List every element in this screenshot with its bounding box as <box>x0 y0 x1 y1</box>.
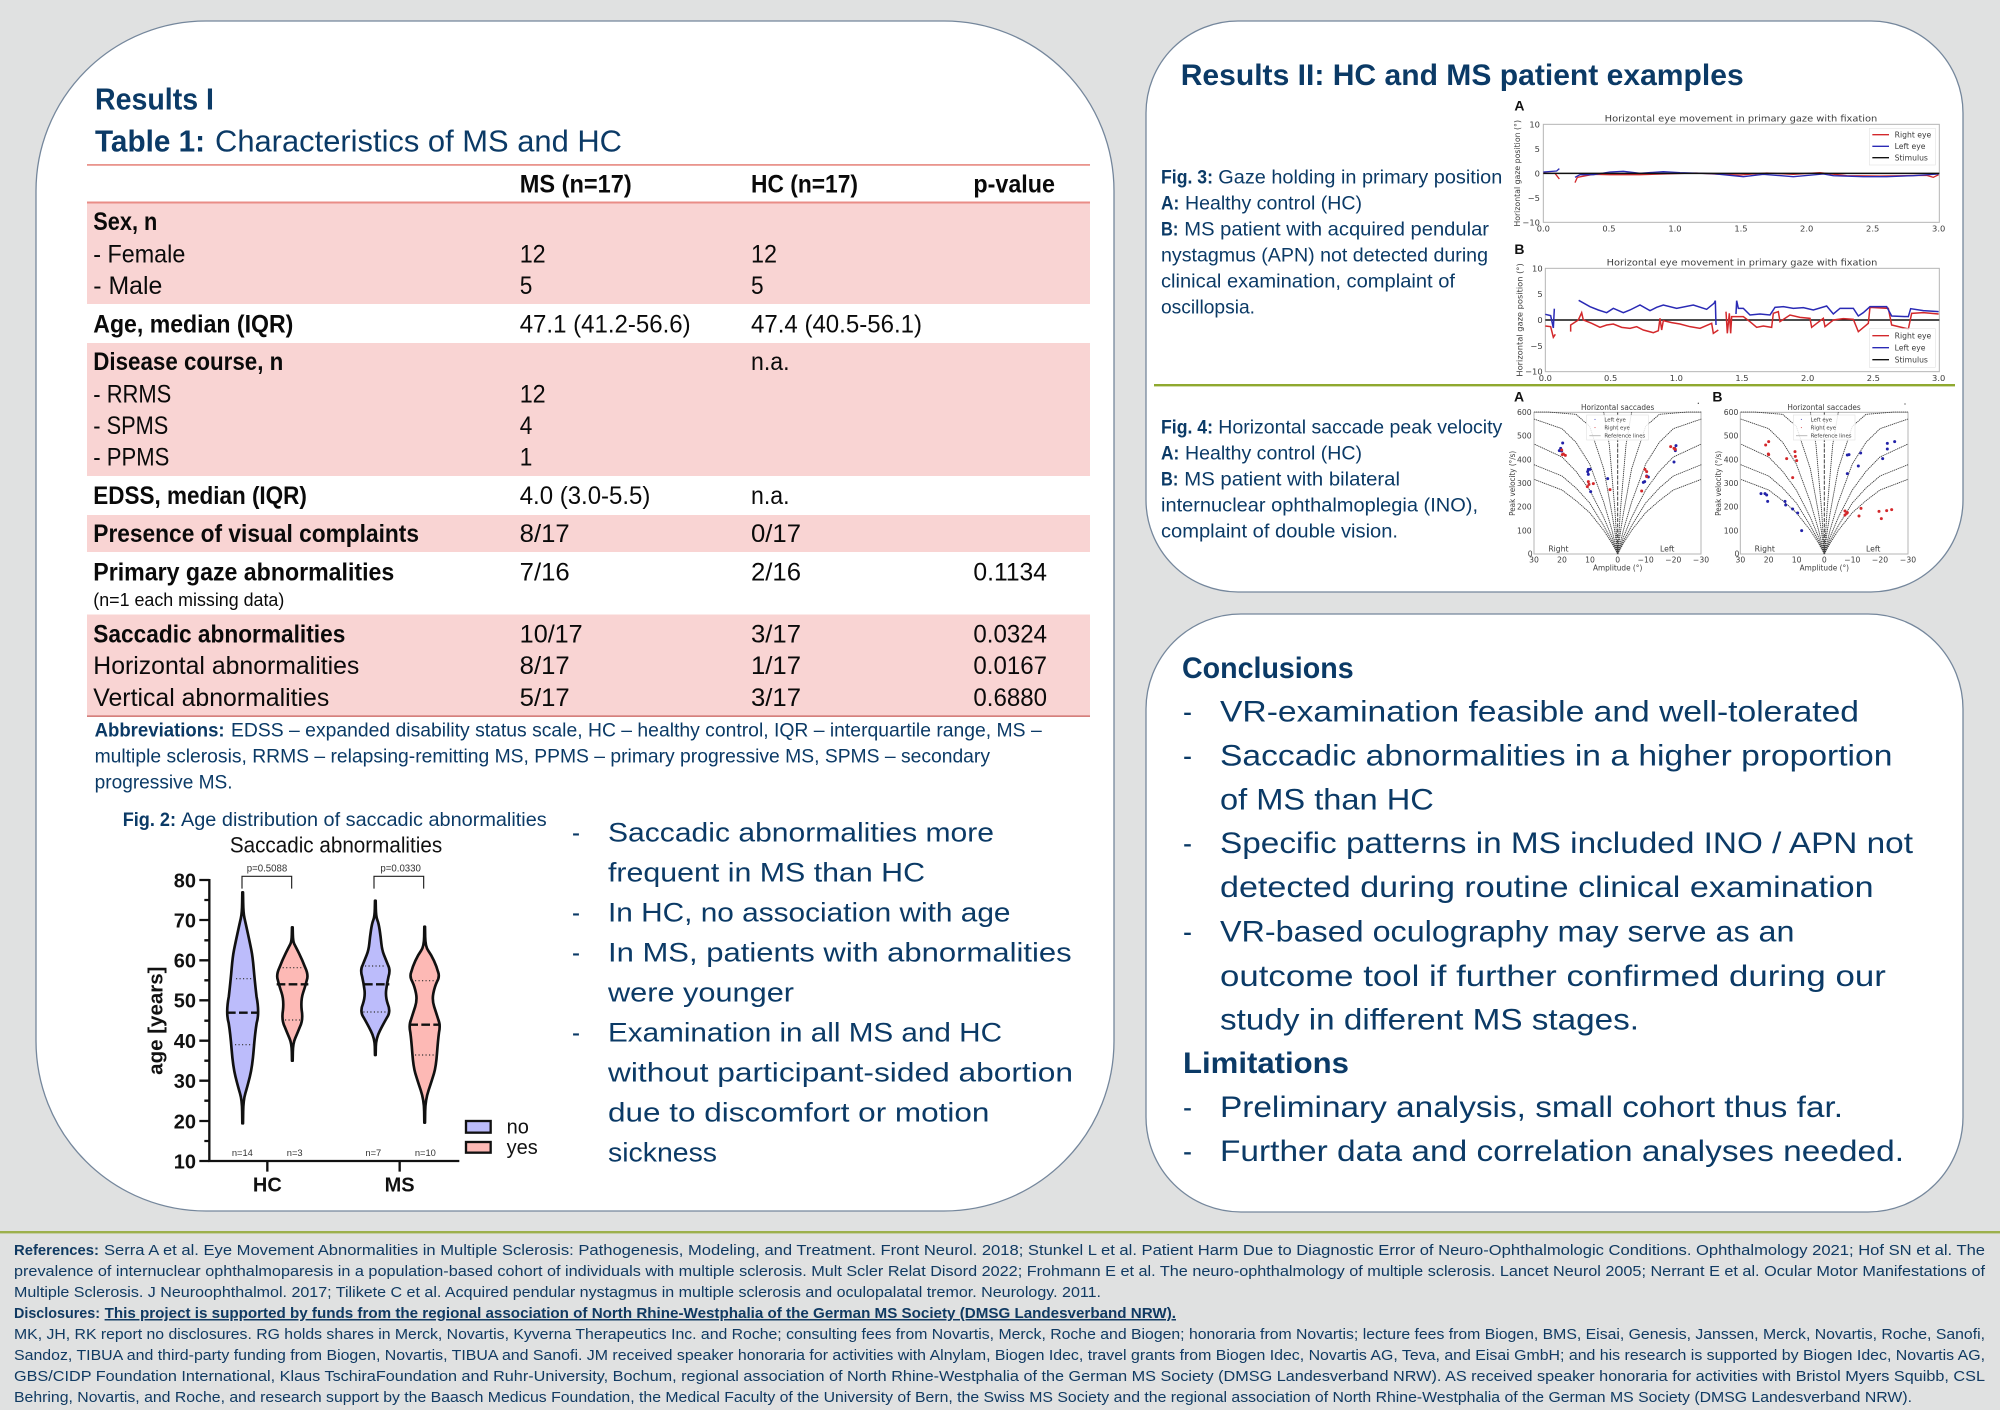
references: References: <box>14 1242 99 1259</box>
y axis labels: 50 <box>174 991 196 1013</box>
legend <box>466 1116 538 1159</box>
row: visual complaints: 0/17 <box>751 520 801 548</box>
figure 3 caption: Fig. 3: <box>1161 166 1213 188</box>
list: conclusions: - <box>1183 696 1192 729</box>
row: vertical abnormalities: Vertical abnormalities <box>93 684 329 712</box>
abbreviations text <box>95 720 1042 793</box>
chart: fig 3B MS patient gaze trace: −5 <box>1530 341 1543 351</box>
y axis labels: 80 <box>174 870 196 892</box>
chart: fig 4A healthy control saccades: Reference lines <box>1604 433 1645 439</box>
chart: fig 4A healthy control saccades: −20 <box>1665 555 1682 564</box>
chart: fig 3A healthy control gaze trace: 0 <box>1535 168 1540 178</box>
list: conclusions: Specific patterns in MS included INO / APN not <box>1220 827 1914 860</box>
heading: limitations: Limitations <box>1183 1047 1349 1080</box>
chart: fig 4B MS patient saccades: −30 <box>1900 555 1916 564</box>
chart: fig 3A healthy control gaze trace: −5 <box>1528 193 1540 203</box>
abbreviations text: EDSS – expanded disability status scale, HC – healthy control, IQR – interquartile range, MS – <box>231 720 1042 742</box>
row: sex: 5 <box>751 272 764 300</box>
chart: fig 4B MS patient saccades: 0 <box>1822 555 1827 564</box>
chart: fig 3B MS patient gaze trace: 0 <box>1537 315 1543 325</box>
chart: fig 3A healthy control gaze trace: 2.5 <box>1866 224 1879 234</box>
chart: fig 4B MS patient saccades: −10 <box>1844 555 1861 564</box>
row: saccadic abnormalities: 3/17 <box>751 620 801 648</box>
row: saccadic abnormalities <box>93 620 1047 648</box>
figure 3 caption <box>1161 166 1502 318</box>
list: conclusions: - <box>1183 827 1192 860</box>
text block: findings list: without participant-sided abortion <box>607 1058 1073 1088</box>
panel: conclusions and limitations <box>1146 614 1963 1212</box>
row: primary gaze abnormalities: 2/16 <box>751 558 801 586</box>
heading: results II: Results II: HC and MS patient examples <box>1181 59 1744 92</box>
figure 3 caption: Healthy control (HC) <box>1185 192 1362 214</box>
chart: fig 4A healthy control saccades: 0 <box>1615 555 1620 564</box>
text block: findings list <box>572 818 1073 1168</box>
disclosures: Disclosures: <box>14 1305 100 1322</box>
figure 3 caption: MS patient with acquired pendular <box>1184 218 1490 240</box>
figure 3 caption: A: <box>1161 192 1179 214</box>
list: conclusions: outcome tool if further confirmed during our <box>1220 960 1886 993</box>
row: primary gaze abnormalities <box>93 558 1047 610</box>
chart: fig 3B MS patient gaze trace: −10 <box>1525 367 1543 377</box>
figure 3 caption: oscillopsia. <box>1161 296 1255 318</box>
chart: fig 4A healthy control saccades: Horizontal saccades <box>1581 403 1654 412</box>
row: sex: Sex, n <box>93 208 157 236</box>
x axis labels: MS <box>385 1175 415 1197</box>
row: age: 47.4 (40.5-56.1) <box>751 310 922 338</box>
sample size labels: n=7 <box>365 1148 381 1158</box>
chart: fig 3A healthy control gaze trace: 0.0 <box>1537 224 1550 234</box>
row: vertical abnormalities: 0.6880 <box>973 684 1047 712</box>
violin: HC no <box>227 892 259 1123</box>
row: disease course: - PPMS <box>93 444 169 472</box>
chart: fig 4A healthy control saccades: 400 <box>1517 455 1532 464</box>
figure 3 caption: Gaze holding in primary position <box>1218 166 1502 188</box>
row: visual complaints: 8/17 <box>520 520 570 548</box>
disclosures <box>14 1305 1985 1406</box>
chart: fig 3A healthy control gaze trace: A <box>1514 98 1524 114</box>
row: sex: 5 <box>520 272 532 300</box>
chart: fig 3B MS patient gaze trace: Horizontal gaze position (°) <box>1516 263 1525 377</box>
figure 3 caption: B: <box>1161 218 1178 240</box>
chart: fig 3A healthy control gaze trace: 5 <box>1535 144 1540 154</box>
chart: fig 4A healthy control saccades: Right eye <box>1604 425 1630 431</box>
row: sex: - Female <box>93 240 185 268</box>
text block: findings list: - <box>572 1018 580 1048</box>
row: primary gaze abnormalities: Primary gaze abnormalities <box>93 558 394 586</box>
text block: findings list: were younger <box>607 978 794 1008</box>
chart: fig 4B MS patient saccades: 500 <box>1724 432 1738 441</box>
chart: fig 3B MS patient gaze trace: Right eye <box>1895 331 1931 340</box>
sample size labels <box>232 1148 436 1158</box>
disclosures: MK, JH, RK report no disclosures. RG holds shares in Merck, Novartis, Kyverna Therapeutics Inc. and Roche; consulting fees from Novartis, Merck, Roche and Biogen; honoraria from Novartis; lecture fees from Biogen, BMS, Eisai, Genesis, Janssen, Merck, Novartis, Roche, Sanofi, <box>14 1326 1985 1343</box>
row: disease course: 4 <box>520 412 532 440</box>
list: conclusions: of MS than HC <box>1220 783 1434 816</box>
chart: fig 4B MS patient saccades: B <box>1712 389 1722 405</box>
chart: fig 4B MS patient saccades: 100 <box>1724 526 1738 535</box>
row: visual complaints <box>93 520 801 548</box>
panel: results I <box>36 21 1114 1211</box>
list: limitations: Preliminary analysis, small cohort thus far. <box>1220 1091 1843 1124</box>
legend: no <box>507 1116 529 1138</box>
chart: fig 4B MS patient saccades: Left eye <box>1811 417 1832 423</box>
chart: fig 4A healthy control saccades: Left <box>1660 545 1674 554</box>
chart: fig 3B MS patient gaze trace: 10 <box>1532 263 1543 273</box>
chart: fig 3B MS patient gaze trace: Horizontal eye movement in primary gaze with fixation <box>1607 259 1877 269</box>
chart: fig 3A healthy control gaze trace: Horizontal gaze position (°) <box>1513 120 1522 227</box>
chart: fig 4A healthy control saccades: 100 <box>1517 526 1532 535</box>
chart: fig 4A healthy control saccades: Amplitude (°) <box>1593 564 1642 573</box>
chart: fig 4B MS patient saccades: 300 <box>1724 479 1738 488</box>
chart: fig 4A healthy control saccades: 200 <box>1517 503 1532 512</box>
abbreviations text: Abbreviations: <box>95 720 225 742</box>
list: limitations <box>1183 1091 1904 1168</box>
disclosures: GBS/CIDP Foundation International, Klaus TschiraFoundation and Ruhr-University, Bochum, regional association of North Rhine-Westphalia of the German MS Society (DMSG Landesverband NRW). AS received speaker honoraria for activities with Bristol Myers Squibb, CSL <box>14 1368 1985 1385</box>
row: EDSS: 4.0 (3.0-5.5) <box>520 482 650 510</box>
text block: findings list: sickness <box>608 1138 717 1168</box>
chart: fig 3B MS patient gaze trace: 1.0 <box>1670 373 1683 383</box>
chart: fig 4A healthy control saccades: −30 <box>1693 555 1709 564</box>
list: limitations: - <box>1183 1091 1192 1124</box>
chart: fig 4B MS patient saccades: Horizontal saccades <box>1787 403 1861 412</box>
table header row: MS (n=17) <box>520 171 632 199</box>
x axis labels: HC <box>253 1175 282 1197</box>
y axis labels: 40 <box>174 1031 196 1053</box>
text block: findings list: - <box>572 938 580 968</box>
list: conclusions: VR-based oculography may serve as an <box>1220 916 1794 948</box>
y axis labels: 70 <box>174 910 196 932</box>
figure 4 caption: MS patient with bilateral <box>1184 468 1400 490</box>
row: age: 47.1 (41.2-56.6) <box>520 310 691 338</box>
row: horizontal abnormalities <box>93 652 1047 680</box>
chart: fig 3A healthy control gaze trace: 0.5 <box>1602 224 1616 234</box>
y axis labels: 20 <box>174 1111 196 1133</box>
chart: fig 4A healthy control saccades: 300 <box>1517 479 1532 488</box>
chart: fig 4B MS patient saccades: Right <box>1755 545 1775 554</box>
row: age <box>93 310 922 338</box>
row: disease course: 12 <box>520 380 546 408</box>
chart: fig 3B MS patient gaze trace: 0.0 <box>1539 373 1552 383</box>
chart: fig 3B MS patient gaze trace: Left eye <box>1895 343 1926 352</box>
row: visual complaints: Presence of visual complaints <box>93 520 419 548</box>
panel: results II <box>1146 21 1963 592</box>
heading: table 1: Characteristics of MS and HC <box>215 124 622 159</box>
chart: fig 4B MS patient saccades: −20 <box>1872 555 1888 564</box>
list: conclusions: VR-examination feasible and well-tolerated <box>1220 696 1859 729</box>
list: conclusions: Saccadic abnormalities in a higher proportion <box>1220 739 1892 772</box>
figure 4 caption: A: <box>1161 442 1179 464</box>
chart: fig 4B MS patient saccades: 600 <box>1724 408 1738 417</box>
figure 4 caption: Fig. 4: <box>1161 416 1213 438</box>
row: horizontal abnormalities: Horizontal abnormalities <box>93 652 359 680</box>
chart: fig 3A healthy control gaze trace: Horizontal eye movement in primary gaze with fixation <box>1605 115 1877 125</box>
chart: fig 3B MS patient gaze trace: 2.5 <box>1867 373 1880 383</box>
figure 2 caption: Age distribution of saccadic abnormalities <box>181 809 547 831</box>
chart: fig 3A healthy control gaze trace: 2.0 <box>1800 224 1813 234</box>
chart: fig 4A healthy control saccades <box>1508 389 1709 573</box>
list: conclusions: - <box>1183 739 1192 772</box>
chart: fig 3B MS patient gaze trace: 2.0 <box>1801 373 1814 383</box>
text block: findings list: - <box>572 898 580 928</box>
chart: fig 4A healthy control saccades: A <box>1514 389 1524 405</box>
text block: findings list: frequent in MS than HC <box>608 858 925 888</box>
figure 3 caption: nystagmus (APN) not detected during <box>1161 244 1488 266</box>
row: EDSS: n.a. <box>751 482 790 510</box>
chart: fig 3B MS patient gaze trace: 0.5 <box>1604 373 1617 383</box>
chart: fig 4A healthy control saccades: Peak velocity (°/s) <box>1508 451 1517 516</box>
y axis labels <box>174 870 196 1173</box>
chart: fig 4B MS patient saccades: 10 <box>1792 555 1802 564</box>
heading: table 1: Table 1: <box>95 124 205 159</box>
row: primary gaze abnormalities: 7/16 <box>520 558 570 586</box>
chart: violin plot of age by saccadic abnormalities <box>145 833 538 1197</box>
chart: fig 3A healthy control gaze trace <box>1513 98 1945 234</box>
chart: fig 3A healthy control gaze trace: Right eye <box>1895 130 1931 139</box>
row: disease course: 1 <box>520 444 532 472</box>
chart: fig 3B MS patient gaze trace: 1.5 <box>1735 373 1749 383</box>
chart: fig 3B MS patient gaze trace <box>1514 241 1945 383</box>
chart: fig 3A healthy control gaze trace: 1.0 <box>1668 224 1682 234</box>
chart: fig 4B MS patient saccades: 20 <box>1764 555 1774 564</box>
text block: findings list: In HC, no association with age <box>608 898 1010 928</box>
row: saccadic abnormalities: 10/17 <box>520 620 583 648</box>
table: characteristics of MS and HC <box>87 164 1090 717</box>
row: saccadic abnormalities: Saccadic abnormalities <box>93 620 345 648</box>
figure 4 charts <box>1508 389 1916 573</box>
row: disease course: n.a. <box>751 348 790 376</box>
violin: MS no <box>361 901 389 1055</box>
row: horizontal abnormalities: 1/17 <box>751 652 801 680</box>
chart: fig 3B MS patient gaze trace: Stimulus <box>1895 355 1928 364</box>
figure 4 caption: B: <box>1161 468 1178 490</box>
chart: fig 3B MS patient gaze trace: 5 <box>1537 289 1543 299</box>
table header row: p-value <box>973 171 1055 199</box>
list: conclusions: study in different MS stages. <box>1220 1004 1639 1037</box>
table header row <box>520 171 1055 199</box>
row: sex <box>93 208 777 300</box>
references: Serra A et al. Eye Movement Abnormalities in Multiple Sclerosis: Pathogenesis, Modeling, and Treatment. Front Neurol. 2018; Stunkel L et al. Patient Harm Due to Diagnostic Error of Neuro-Ophthalmologic Conditions. Ophthalmology 2021; Hof SN et al. The <box>104 1242 1985 1259</box>
chart: fig 4B MS patient saccades: 0 <box>1734 550 1739 559</box>
y axis <box>199 879 459 1172</box>
chart: fig 4A healthy control saccades: 10 <box>1585 555 1595 564</box>
text block: findings list: Saccadic abnormalities more <box>608 818 994 848</box>
figure 4 caption: internuclear ophthalmoplegia (INO), <box>1161 494 1478 516</box>
heading: conclusions: Conclusions <box>1182 652 1354 685</box>
abbreviations text: progressive MS. <box>95 771 233 793</box>
chart: fig 4B MS patient saccades: Peak velocity (°/s) <box>1714 451 1723 516</box>
y axis labels: 30 <box>174 1071 196 1093</box>
references <box>14 1242 1986 1301</box>
disclosures: This project is supported by funds from the regional association of North Rhine-Westphalia of the German MS Society (DMSG Landesverband NRW). <box>105 1305 1176 1322</box>
list: conclusions: detected during routine clinical examination <box>1220 871 1874 904</box>
row: disease course: Disease course, n <box>93 348 283 376</box>
chart title: Saccadic abnormalities <box>230 833 442 858</box>
sample size labels: n=10 <box>415 1148 436 1158</box>
chart: fig 4B MS patient saccades: 400 <box>1724 455 1738 464</box>
row: horizontal abnormalities: 8/17 <box>520 652 570 680</box>
references: prevalence of internuclear ophthalmoparesis in a population-based cohort of individuals with multiple sclerosis. Mult Scler Relat Disord 2022; Frohmann E et al. The neuro-ophthalmology of multiple sclerosis. Lancet Neurol 2005; Nerrant E et al. Ocular Motor Manifestations of <box>14 1263 1986 1280</box>
row: horizontal abnormalities: 0.0167 <box>973 652 1047 680</box>
chart: fig 3B MS patient gaze trace: B <box>1514 241 1524 257</box>
row: sex: 12 <box>751 240 777 268</box>
chart: fig 4B MS patient saccades: Amplitude (°) <box>1800 564 1849 573</box>
chart: fig 4A healthy control saccades: Left eye <box>1604 417 1626 423</box>
chart: fig 3A healthy control gaze trace: 10 <box>1529 119 1540 129</box>
x axis labels <box>253 1175 415 1197</box>
chart: fig 4A healthy control saccades: −10 <box>1638 555 1654 564</box>
chart: fig 3A healthy control gaze trace: 1.5 <box>1734 224 1748 234</box>
list: limitations: - <box>1183 1135 1192 1168</box>
violin: MS yes <box>409 927 441 1123</box>
list: limitations: Further data and correlation analyses needed. <box>1220 1135 1904 1168</box>
abbreviations text: multiple sclerosis, RRMS – relapsing-remitting MS, PPMS – primary progressive MS, SPMS – secondary <box>95 746 990 768</box>
sample size labels: n=3 <box>287 1148 303 1158</box>
row: disease course <box>93 348 790 472</box>
figure 4 caption: Healthy control (HC) <box>1185 442 1362 464</box>
chart: fig 3A healthy control gaze trace: 3.0 <box>1932 224 1945 234</box>
figure 3 caption: clinical examination, complaint of <box>1161 270 1456 292</box>
chart: fig 3A healthy control gaze trace: Stimulus <box>1895 153 1928 162</box>
figure 2 caption: Fig. 2: <box>123 809 176 831</box>
significance brackets <box>242 864 424 889</box>
disclosures: Sandoz, TIBUA and third-party funding from Biogen, Novartis, TIBUA and Sanofi. JM received speaker honoraria for activities with Alnylam, Biogen Idec, travel grants from Biogen Idec, Novartis AG, Teva, and Eisai GmbH; and his research is supported by Biogen Idec, Novartis AG, <box>14 1347 1985 1364</box>
y axis labels: 60 <box>174 951 196 973</box>
list: conclusions <box>1183 696 1914 1037</box>
row: disease course: - RRMS <box>93 380 171 408</box>
text block: findings list: due to discomfort or motion <box>608 1098 989 1128</box>
chart: fig 4B MS patient saccades: Right eye <box>1811 425 1836 431</box>
figure 4 caption: Horizontal saccade peak velocity <box>1218 416 1503 438</box>
row: sex: 12 <box>520 240 546 268</box>
chart: fig 4B MS patient saccades: Reference lines <box>1811 433 1852 439</box>
significance brackets: p=0.0330 <box>380 864 421 875</box>
figure 4 caption <box>1161 416 1503 542</box>
row: age: Age, median (IQR) <box>93 310 293 338</box>
text block: findings list: - <box>572 818 580 848</box>
chart: fig 4B MS patient saccades: 30 <box>1735 555 1745 564</box>
sample size labels: n=14 <box>232 1148 253 1158</box>
chart: fig 4A healthy control saccades: 0 <box>1528 550 1533 559</box>
y axis labels: 10 <box>174 1151 196 1173</box>
chart: fig 4A healthy control saccades: 30 <box>1529 555 1539 564</box>
chart: fig 4B MS patient saccades: Left <box>1866 545 1880 554</box>
row: disease course: - SPMS <box>93 412 168 440</box>
figure 3 charts <box>1513 98 1945 383</box>
row: vertical abnormalities: 5/17 <box>520 684 570 712</box>
row: primary gaze abnormalities: (n=1 each missing data) <box>93 589 284 610</box>
row: primary gaze abnormalities: 0.1134 <box>973 558 1047 586</box>
significance brackets: p=0.5088 <box>247 864 287 875</box>
chart: fig 4A healthy control saccades: 20 <box>1557 555 1567 564</box>
y axis title: age [years] <box>145 966 168 1075</box>
figure 4 caption: complaint of double vision. <box>1161 520 1398 542</box>
chart: fig 4A healthy control saccades: Right <box>1548 545 1569 554</box>
disclosures: Behring, Novartis, and Roche, and research support by the Baasch Medicus Foundation, the Medical Faculty of the University of Bern, the Swiss MS Society and the regional association of North Rhine-Westphalia of the German MS Society (DMSG Landesverband NRW). <box>14 1389 1912 1406</box>
chart: fig 4A healthy control saccades: 500 <box>1517 432 1532 441</box>
chart: fig 4A healthy control saccades: 600 <box>1517 408 1532 417</box>
chart: fig 4B MS patient saccades: 200 <box>1724 503 1738 512</box>
footer: references and disclosures <box>14 1242 1986 1406</box>
row: vertical abnormalities: 3/17 <box>751 684 801 712</box>
text block: findings list: Examination in all MS and HC <box>608 1018 1002 1048</box>
list: conclusions: - <box>1183 916 1192 948</box>
row: EDSS <box>93 482 790 510</box>
legend: yes <box>507 1137 538 1159</box>
chart: fig 4B MS patient saccades <box>1712 389 1916 573</box>
chart: fig 3A healthy control gaze trace: Left eye <box>1895 142 1926 151</box>
row: sex: - Male <box>93 272 162 300</box>
chart: fig 3B MS patient gaze trace: 3.0 <box>1932 373 1945 383</box>
heading: results I: Results I <box>95 81 214 116</box>
table header row: HC (n=17) <box>751 171 858 199</box>
row: vertical abnormalities <box>93 684 1047 712</box>
violin: HC yes <box>277 927 308 1061</box>
row: EDSS: EDSS, median (IQR) <box>93 482 307 510</box>
references: Multiple Sclerosis. J Neuroophthalmol. 2017; Tilikete C et al. Acquired pendular nystagmus in multiple sclerosis and oculopalatal tremor. Neurology. 2011. <box>14 1284 1101 1301</box>
row: saccadic abnormalities: 0.0324 <box>973 620 1047 648</box>
text block: findings list: In MS, patients with abnormalities <box>608 938 1072 968</box>
chart: fig 3A healthy control gaze trace: −10 <box>1522 217 1540 227</box>
